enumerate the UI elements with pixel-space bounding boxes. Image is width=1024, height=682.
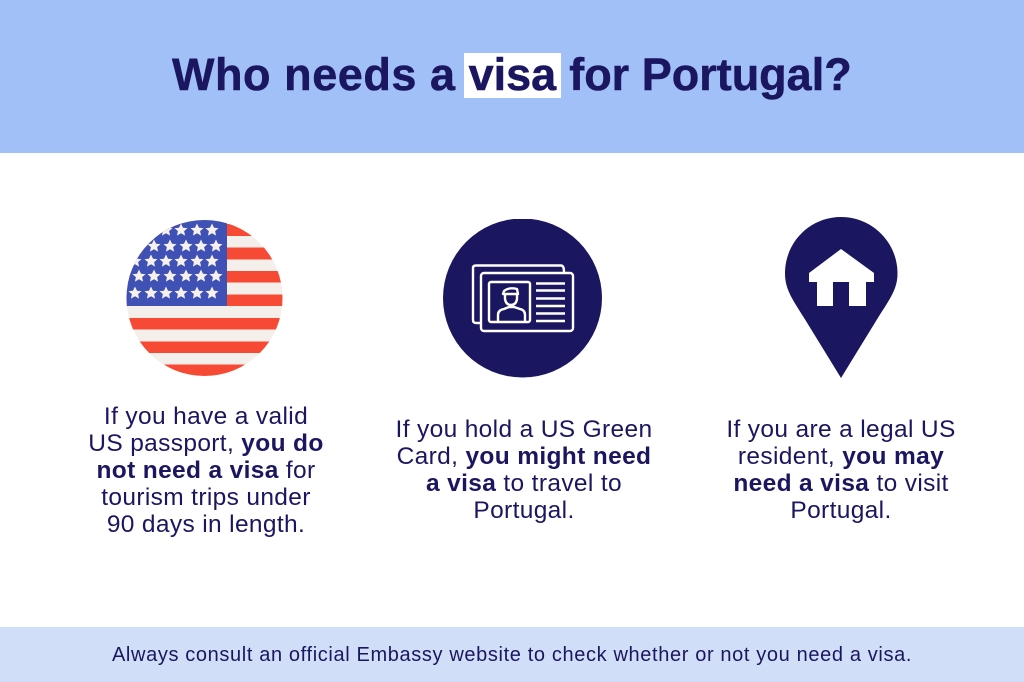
icon: US flag	[126, 220, 282, 376]
text: legal resident: If you are a legal US	[726, 416, 956, 443]
text: US passport: tourism trips under	[101, 484, 311, 511]
text: Green Card	[396, 416, 652, 524]
text: US passport: not need a visa for	[96, 457, 316, 484]
title: visa	[469, 49, 556, 100]
icon: location pin with house	[785, 217, 898, 378]
text: US passport: 90 days in length.	[107, 511, 305, 538]
text: legal resident: Portugal.	[790, 497, 892, 524]
text: US passport: US passport, you do	[88, 430, 324, 457]
footer band	[0, 627, 1024, 682]
text: legal resident: resident, you may	[738, 443, 944, 470]
title: Who needs a for Portugal?	[172, 49, 852, 100]
text: Green Card: Card, you might need	[397, 443, 651, 470]
text: legal resident: need a visa to visit	[733, 470, 949, 497]
text: US passport: If you have a valid	[104, 403, 308, 430]
text: Green Card: a visa to travel to	[426, 470, 622, 497]
footer note: Always consult an official Embassy website to check whether or not you need a visa.	[112, 644, 912, 666]
text: Green Card: Portugal.	[473, 497, 575, 524]
icon: green card in circle	[443, 219, 602, 378]
header band	[0, 0, 1024, 153]
text: US passport	[88, 403, 324, 538]
text: legal resident	[726, 416, 956, 524]
text: Green Card: If you hold a US Green	[396, 416, 652, 443]
